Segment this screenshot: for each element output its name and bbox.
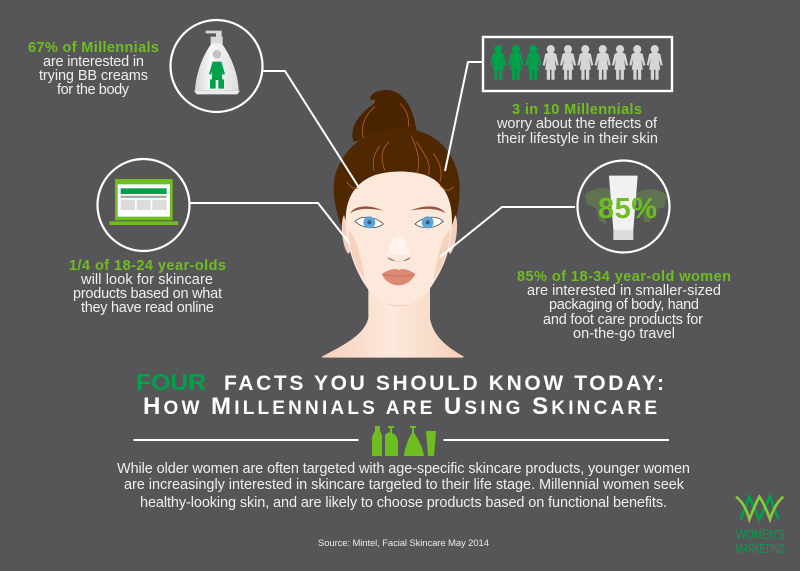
title: FACTS YOU SHOULD KNOW TODAY:: [224, 372, 664, 395]
title: FOUR: [136, 369, 206, 395]
text: 85% of 18-34 year-old women: 85% of 18-34 year-old women: [517, 269, 731, 285]
cheek contour: [348, 230, 450, 280]
body paragraph: are increasingly interested in skincare targeted to their life stage. Millennial women seek: [124, 477, 685, 493]
connector lines: [190, 62, 575, 257]
text: 1/4 of 18-24 year-olds: will look for skincare: [80, 272, 213, 288]
title: [136, 369, 664, 420]
callout: laptop circle: [98, 159, 190, 251]
text: 1/4 of 18-24 year-olds: 1/4 of 18-24 year-olds: [69, 258, 226, 274]
text: 3 in 10 Millennials: 3 in 10 Millennials: [512, 102, 642, 118]
text: 3 in 10 Millennials: [496, 102, 658, 147]
ears: [342, 215, 353, 254]
icon: four green bottles: [372, 426, 436, 456]
text: 85% of 18-34 year-old women: on-the-go travel: [573, 326, 675, 342]
text: 67% of Millennials: for the body: [57, 82, 130, 98]
hair: [334, 128, 460, 235]
text: 85% of 18-34 year-old women: [517, 269, 731, 342]
text: 1/4 of 18-24 year-olds: products based on what: [73, 286, 222, 302]
text: 1/4 of 18-24 year-olds: they have read online: [81, 300, 214, 316]
logo: Women's Marketing: [736, 497, 785, 556]
title: HOW MILLENNIALS ARE USING SKINCARE: [143, 393, 657, 420]
icon: laptop: [109, 179, 178, 225]
icon: pump bottle: [194, 31, 240, 94]
callout: ten figures box: [483, 37, 672, 91]
text: 67% of Millennials: are interested in: [43, 54, 144, 70]
hair bun: [352, 90, 417, 142]
hair strands: [347, 103, 453, 190]
icon: world map: [585, 188, 667, 225]
face skin: [346, 171, 452, 307]
text: 85% of 18-34 year-old women: are interested in smaller-sized: [527, 283, 721, 299]
eyes: [355, 216, 443, 228]
lips: [382, 269, 415, 285]
neck: [322, 288, 464, 358]
callout: tube circle: [578, 160, 670, 252]
eyebrows: [350, 206, 383, 213]
text: 67% of Millennials: trying BB creams: [39, 68, 148, 84]
body paragraph: [117, 461, 690, 511]
icons: green figures: [490, 45, 541, 80]
body paragraph: healthy-looking skin, and are likely to choose products based on functional benefits.: [140, 495, 667, 511]
text: 3 in 10 Millennials: worry about the effects of: [496, 116, 658, 132]
illustration: woman's face: [322, 90, 464, 358]
text: 85% of 18-34 year-old women: packaging of body, hand: [549, 297, 699, 313]
icon: tube: [609, 176, 638, 240]
text: 1/4 of 18-24 year-olds: [69, 258, 226, 316]
nose: [386, 236, 411, 262]
source note: Source: Mintel, Facial Skincare May 2014: [318, 538, 489, 549]
icons: grey figures: [543, 45, 663, 80]
stat: 85%: 85%: [598, 193, 657, 225]
text: 67% of Millennials: 67% of Millennials: [28, 40, 159, 56]
text: 67% of Millennials: [28, 40, 159, 98]
text: 85% of 18-34 year-old women: and foot care products for: [543, 312, 703, 328]
callout: bottle circle: [170, 20, 262, 112]
text: 3 in 10 Millennials: their lifestyle in their skin: [497, 131, 658, 147]
divider with bottles: [134, 426, 669, 456]
body paragraph: While older women are often targeted with age-specific skincare products, younger women: [117, 461, 690, 477]
